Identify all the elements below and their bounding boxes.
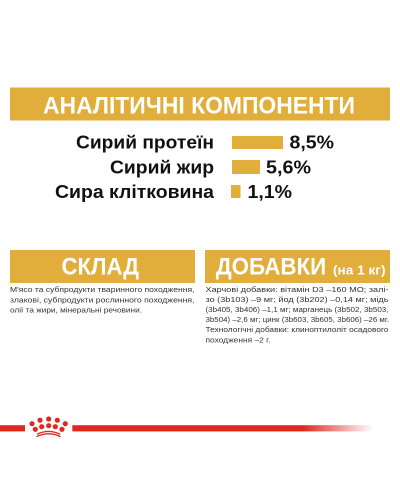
red line: left segment: [0, 425, 25, 431]
text: additives: Харчові добавки: вітамін D3 –160 МО; залі-: [206, 285, 389, 294]
bar: crude fat: [232, 160, 260, 174]
text: additives: 3b504) –2,6 мг; цинк (3b603, 3b605, 3b606) –26 мг.: [206, 315, 389, 324]
value: crude protein: 8,5%: [290, 133, 334, 153]
heading: composition: СКЛАД: [62, 253, 139, 280]
red line: right segment fading out: [72, 425, 373, 431]
label: crude fibre: Сира клітковина: [55, 182, 215, 202]
bar: crude protein: [232, 136, 283, 149]
text: composition: олії та жири, мінеральні речовини.: [10, 306, 142, 315]
text: composition: М'ясо та субпродукти тваринного походження,: [10, 285, 194, 294]
bar: crude fibre: [231, 185, 240, 198]
panel: additives header: [205, 250, 390, 283]
text: additives: (3b405, 3b406) –1,1 мг; марганець (3b502, 3b503,: [206, 305, 388, 314]
panel: analytical components banner: [10, 88, 390, 120]
heading: additives: ДОБАВКИ: [216, 253, 326, 280]
panel: composition header: [10, 250, 195, 283]
icon: royal crown: [29, 416, 68, 437]
value: crude fibre: 1,1%: [248, 182, 292, 202]
text: additives: [206, 285, 389, 344]
text: additives: зо (3b103) –9 мг; йод (3b202) –0,14 мг; мідь: [206, 295, 389, 304]
text: composition: злакові, субпродукти рослинного походження,: [10, 295, 194, 304]
heading: analytical components: АНАЛІТИЧНІ КОМПОНЕНТИ: [43, 92, 355, 119]
text: additives: походження –2 г.: [206, 335, 270, 344]
label: crude fat: Сирий жир: [110, 158, 214, 178]
heading: per 1 kg: (на 1 кг): [333, 263, 386, 277]
text: additives: Технологічні добавки: клиноптилоліт осадового: [206, 325, 388, 334]
label: crude protein: Сирий протеїн: [76, 133, 214, 153]
value: crude fat: 5,6%: [266, 158, 311, 178]
text: composition: [10, 285, 194, 315]
